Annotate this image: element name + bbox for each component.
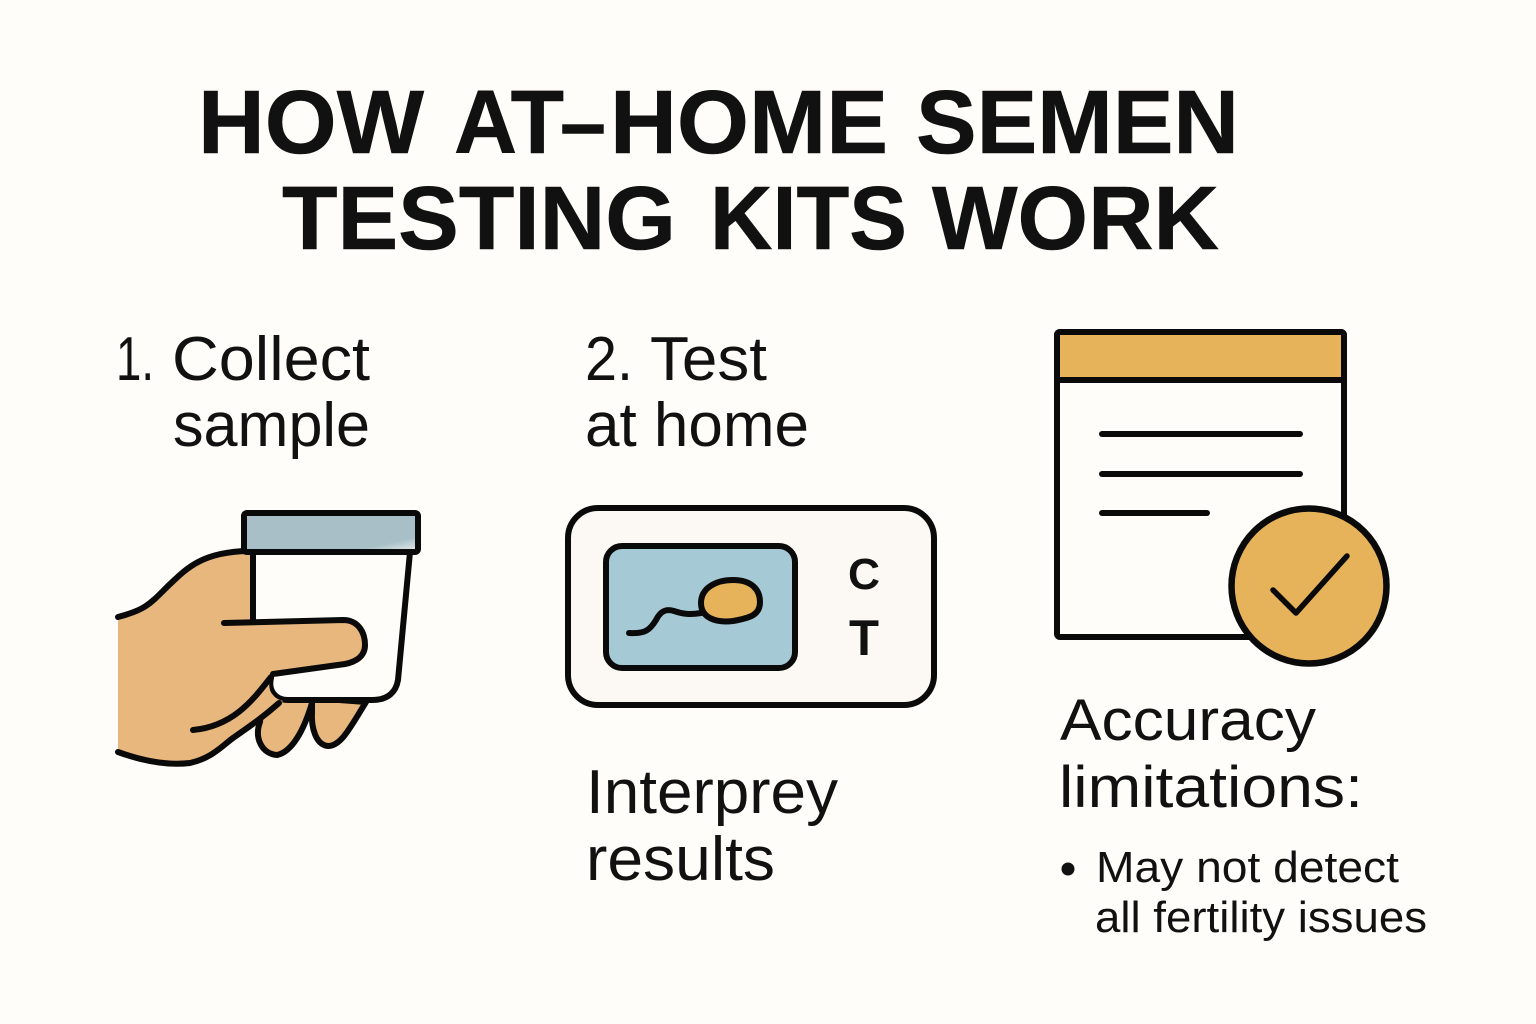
step 1 heading: Collect (172, 325, 370, 394)
test window (606, 546, 795, 668)
interpret results label: Interprey (586, 758, 838, 827)
bullet: limitation: all fertility issues (1095, 893, 1427, 942)
step 2 heading: at home (585, 391, 809, 460)
hand fill (118, 551, 365, 764)
accuracy limitations heading: limitations: (1059, 755, 1363, 820)
step 2 heading (585, 325, 809, 460)
step 1 heading (116, 325, 370, 460)
report lines (1102, 434, 1300, 513)
C and T markers (848, 550, 880, 666)
step 2 heading: 2. (585, 325, 633, 394)
title: HOW (198, 73, 424, 173)
report header band (1057, 332, 1344, 380)
icon: report with check badge (1057, 332, 1386, 664)
title: KITS (710, 169, 907, 269)
title: – (560, 73, 606, 173)
title: SEMEN (916, 73, 1239, 173)
accuracy limitations heading: Accuracy (1060, 688, 1316, 753)
title: TESTING (282, 169, 676, 269)
lower fingers (258, 698, 312, 755)
bullet: limitation (1062, 843, 1427, 942)
cup body (253, 552, 410, 700)
bullet: limitation: May not detect (1096, 843, 1399, 892)
interpret results label: results (586, 825, 775, 894)
C and T markers: T (849, 610, 879, 666)
title: WORK (932, 169, 1219, 269)
title: HOME (610, 73, 888, 173)
icon: hand holding sample cup (118, 513, 418, 764)
title (198, 73, 1239, 269)
icon: test cassette (568, 508, 934, 705)
C and T markers: C (848, 550, 880, 599)
check badge (1232, 508, 1386, 664)
accuracy limitations heading (1059, 688, 1363, 820)
step 2 heading: Test (650, 325, 767, 394)
cup lid (244, 513, 418, 552)
step 1 heading: sample (173, 391, 370, 460)
sperm head (701, 580, 760, 621)
interpret results label (586, 758, 838, 894)
step 1 heading: 1. (116, 325, 154, 394)
hand outline (118, 551, 248, 617)
sperm tail (629, 610, 701, 633)
check mark (1273, 556, 1347, 613)
title: AT (454, 73, 564, 173)
